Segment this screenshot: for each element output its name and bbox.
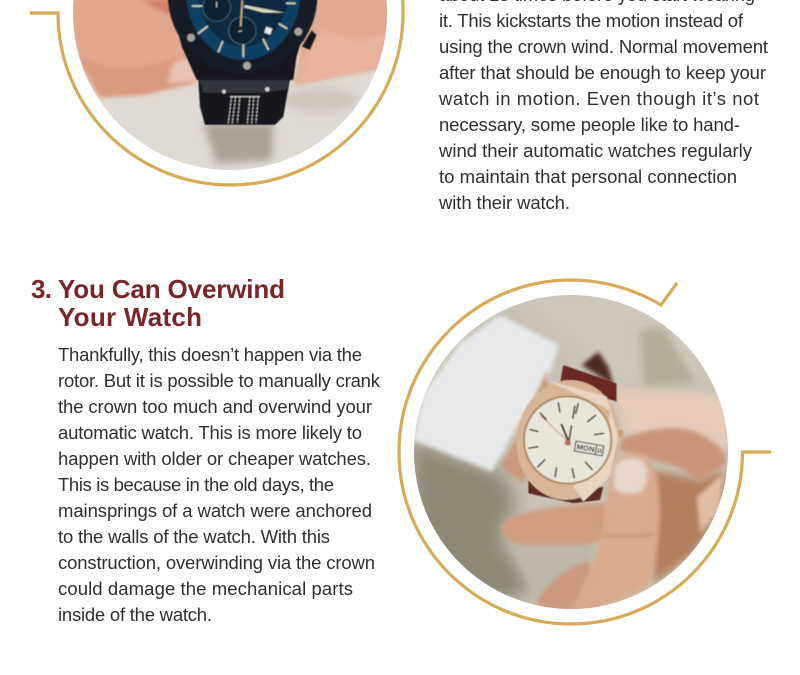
photo: hands holding black chronograph watch [67,0,393,180]
thumb [570,453,660,612]
hour markers [528,403,604,478]
text block: section 3 paragraph: could damage the mechanical parts [58,578,353,599]
text block: top right paragraph: to maintain that personal connection [439,166,737,187]
text block: top right paragraph: watch in motion. Even though it’s not [438,88,759,109]
text block: section 3 paragraph: to the walls of the watch. With this [58,526,330,547]
table shadow [203,123,273,163]
hands [243,5,285,13]
bezel screws [187,34,195,42]
thumb creases [603,533,653,537]
text block: top right paragraph: with their watch. [438,192,570,213]
gold ring with tab: top circle [30,0,403,185]
text block: section 3 paragraph: inside of the watch. [58,604,212,625]
text block: section 3 paragraph: This is because in the old days, the [58,474,334,495]
text block: section 3 paragraph: happen with older or cheaper watches. [58,448,371,469]
text block: top right paragraph: it. This kickstarts the motion instead of [439,10,744,31]
day-date window: 15 [596,448,603,455]
right hand [293,0,393,85]
heading: 3. You Can Overwind Your Watch [31,274,285,332]
left hand [67,0,197,97]
strap [198,80,290,125]
palm behind thumb [653,470,730,583]
heading: 3. You Can Overwind Your Watch: You Can Overwind [58,274,285,304]
day-date window: MON [576,444,595,454]
background cloth tones [524,295,705,386]
dial [523,395,612,485]
crown button [302,30,317,50]
stitching [228,96,258,123]
sub-dials [203,0,256,44]
text block: section 3 paragraph: automatic watch. This is more likely to [58,422,362,443]
text block: top right paragraph: using the crown wind. Normal movement [439,36,768,57]
day-date window [574,441,604,456]
gold ring with tabs: bottom circle [399,280,771,624]
text block: section 3 paragraph [58,344,381,625]
heading: 3. You Can Overwind Your Watch: 3. [31,274,52,304]
text block: section 3 paragraph: rotor. But it is possible to manually crank [58,370,381,391]
heading: 3. You Can Overwind Your Watch: Your Watch [58,302,202,332]
watch hands [540,414,568,441]
wrist under watch [500,370,550,483]
text block: section 3 paragraph: the crown too much and overwind your [58,396,372,417]
index finger [620,428,727,482]
watch case [516,379,620,501]
crown [618,430,623,437]
text block: top right paragraph: after that should be enough to keep your [439,62,766,83]
text block: top right paragraph: wind their automatic watches regularly [438,140,753,161]
text block: section 3 paragraph: Thankfully, this doesn’t happen via the [58,344,362,365]
text block: section 3 paragraph: construction, overwinding via the crown [58,552,375,573]
far strap tip [582,352,613,385]
wrist and back of hand [613,387,730,450]
lower finger [537,560,600,610]
photo: hand winding gold wristwatch [410,290,735,615]
text block: top right paragraph [438,0,768,213]
thumb nail [613,458,647,494]
sleeve cuff [413,315,558,472]
middle finger [500,503,617,545]
watch lugs and case [178,36,300,81]
text block: top right paragraph: necessary, some people like to hand- [439,114,740,135]
text block: section 3 paragraph: mainsprings of a watch were anchored [58,500,372,521]
hour markers [193,3,295,57]
watch straps [560,365,617,402]
